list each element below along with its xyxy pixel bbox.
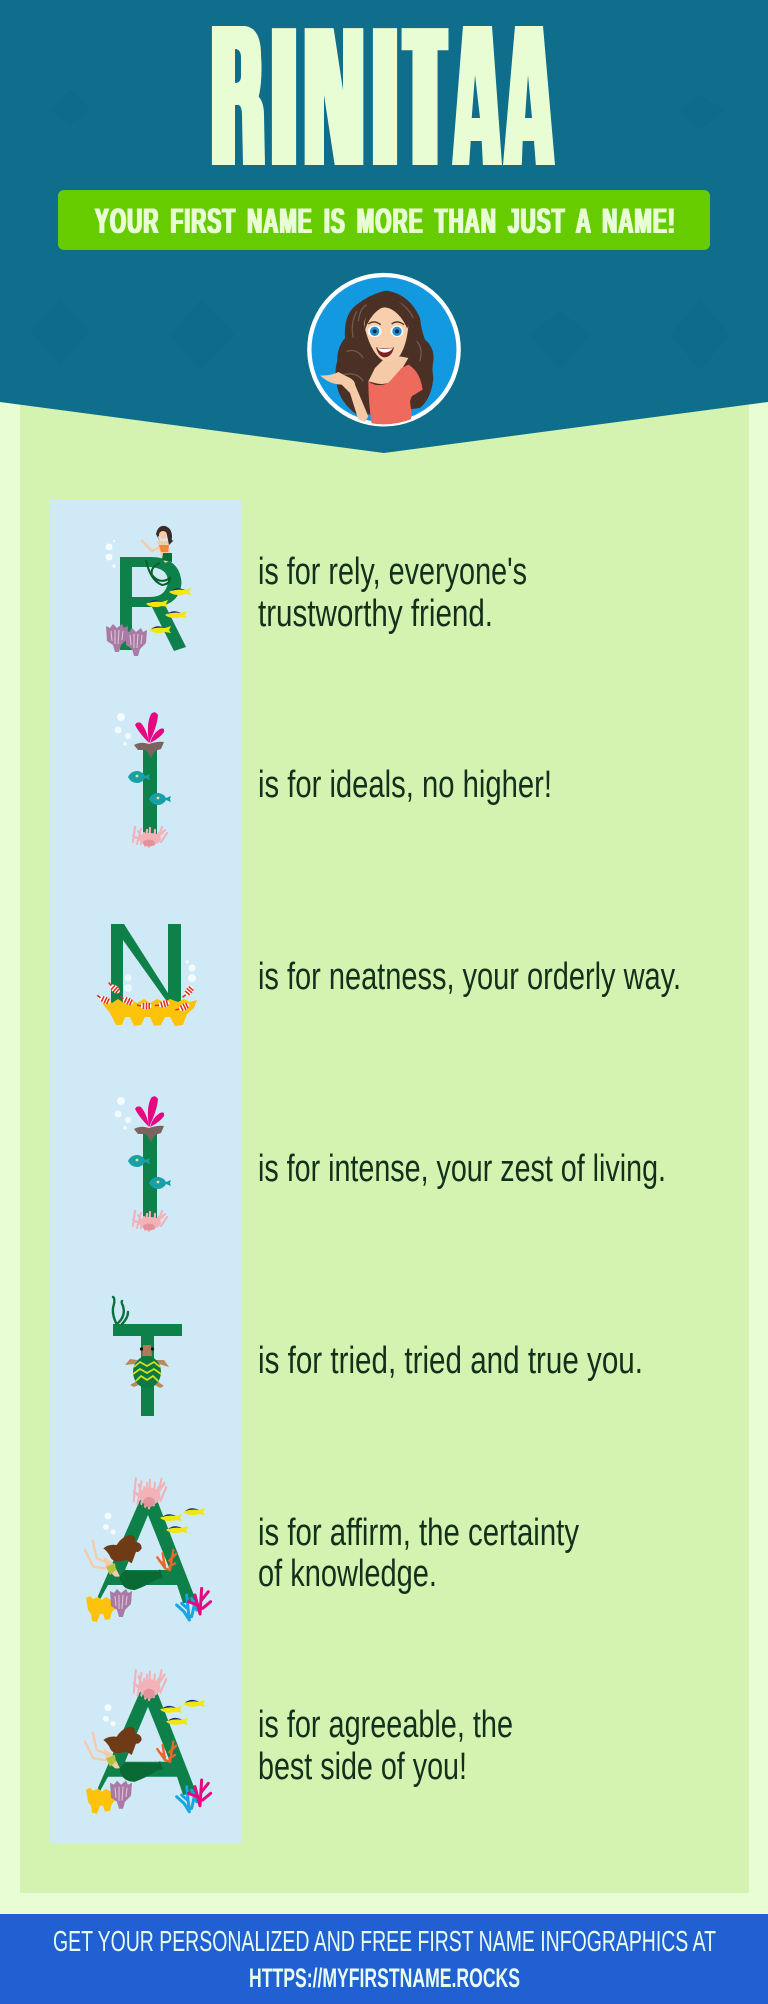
text: letter R: trustworthy friend.: [258, 593, 493, 635]
avatar: cartoon woman: [309, 275, 459, 425]
icon: letter I with pink plant and teal fish: [114, 712, 171, 847]
text: letter R: is for rely, everyone's: [258, 551, 527, 593]
icon: letter A repeated: [85, 1671, 211, 1814]
text: letter A: of knowledge.: [258, 1553, 437, 1595]
title: [212, 0, 555, 208]
text: letter A second: best side of you!: [258, 1746, 467, 1788]
footer line 2: url: HTTPS://MYFIRSTNAME.ROCKS: [249, 1963, 520, 1993]
content panel: [20, 380, 749, 1893]
icon: letter N with yellow coral and shrimp: [95, 924, 197, 1026]
subtitle banner: [58, 190, 710, 250]
icon: letter T with turtle and seaweed: [113, 1297, 182, 1416]
icon: letter R with mermaid: [106, 526, 191, 656]
text: letter A: [258, 1512, 579, 1595]
text: letter R: [258, 551, 527, 635]
text: letter A second: is for agreeable, the: [258, 1704, 513, 1746]
text: letter A: is for affirm, the certainty: [258, 1512, 579, 1554]
text: letter T: is for tried, tried and true you.: [258, 1340, 643, 1382]
text: letter I: is for ideals, no higher!: [258, 764, 552, 806]
header band: [0, 0, 768, 453]
letter strip: [50, 499, 242, 1844]
icon: letter A with mermaid and corals: [85, 1479, 211, 1622]
icon: letter I repeated: [114, 1096, 171, 1231]
text: letter A second: [258, 1704, 513, 1788]
footer band: [0, 1914, 768, 2004]
